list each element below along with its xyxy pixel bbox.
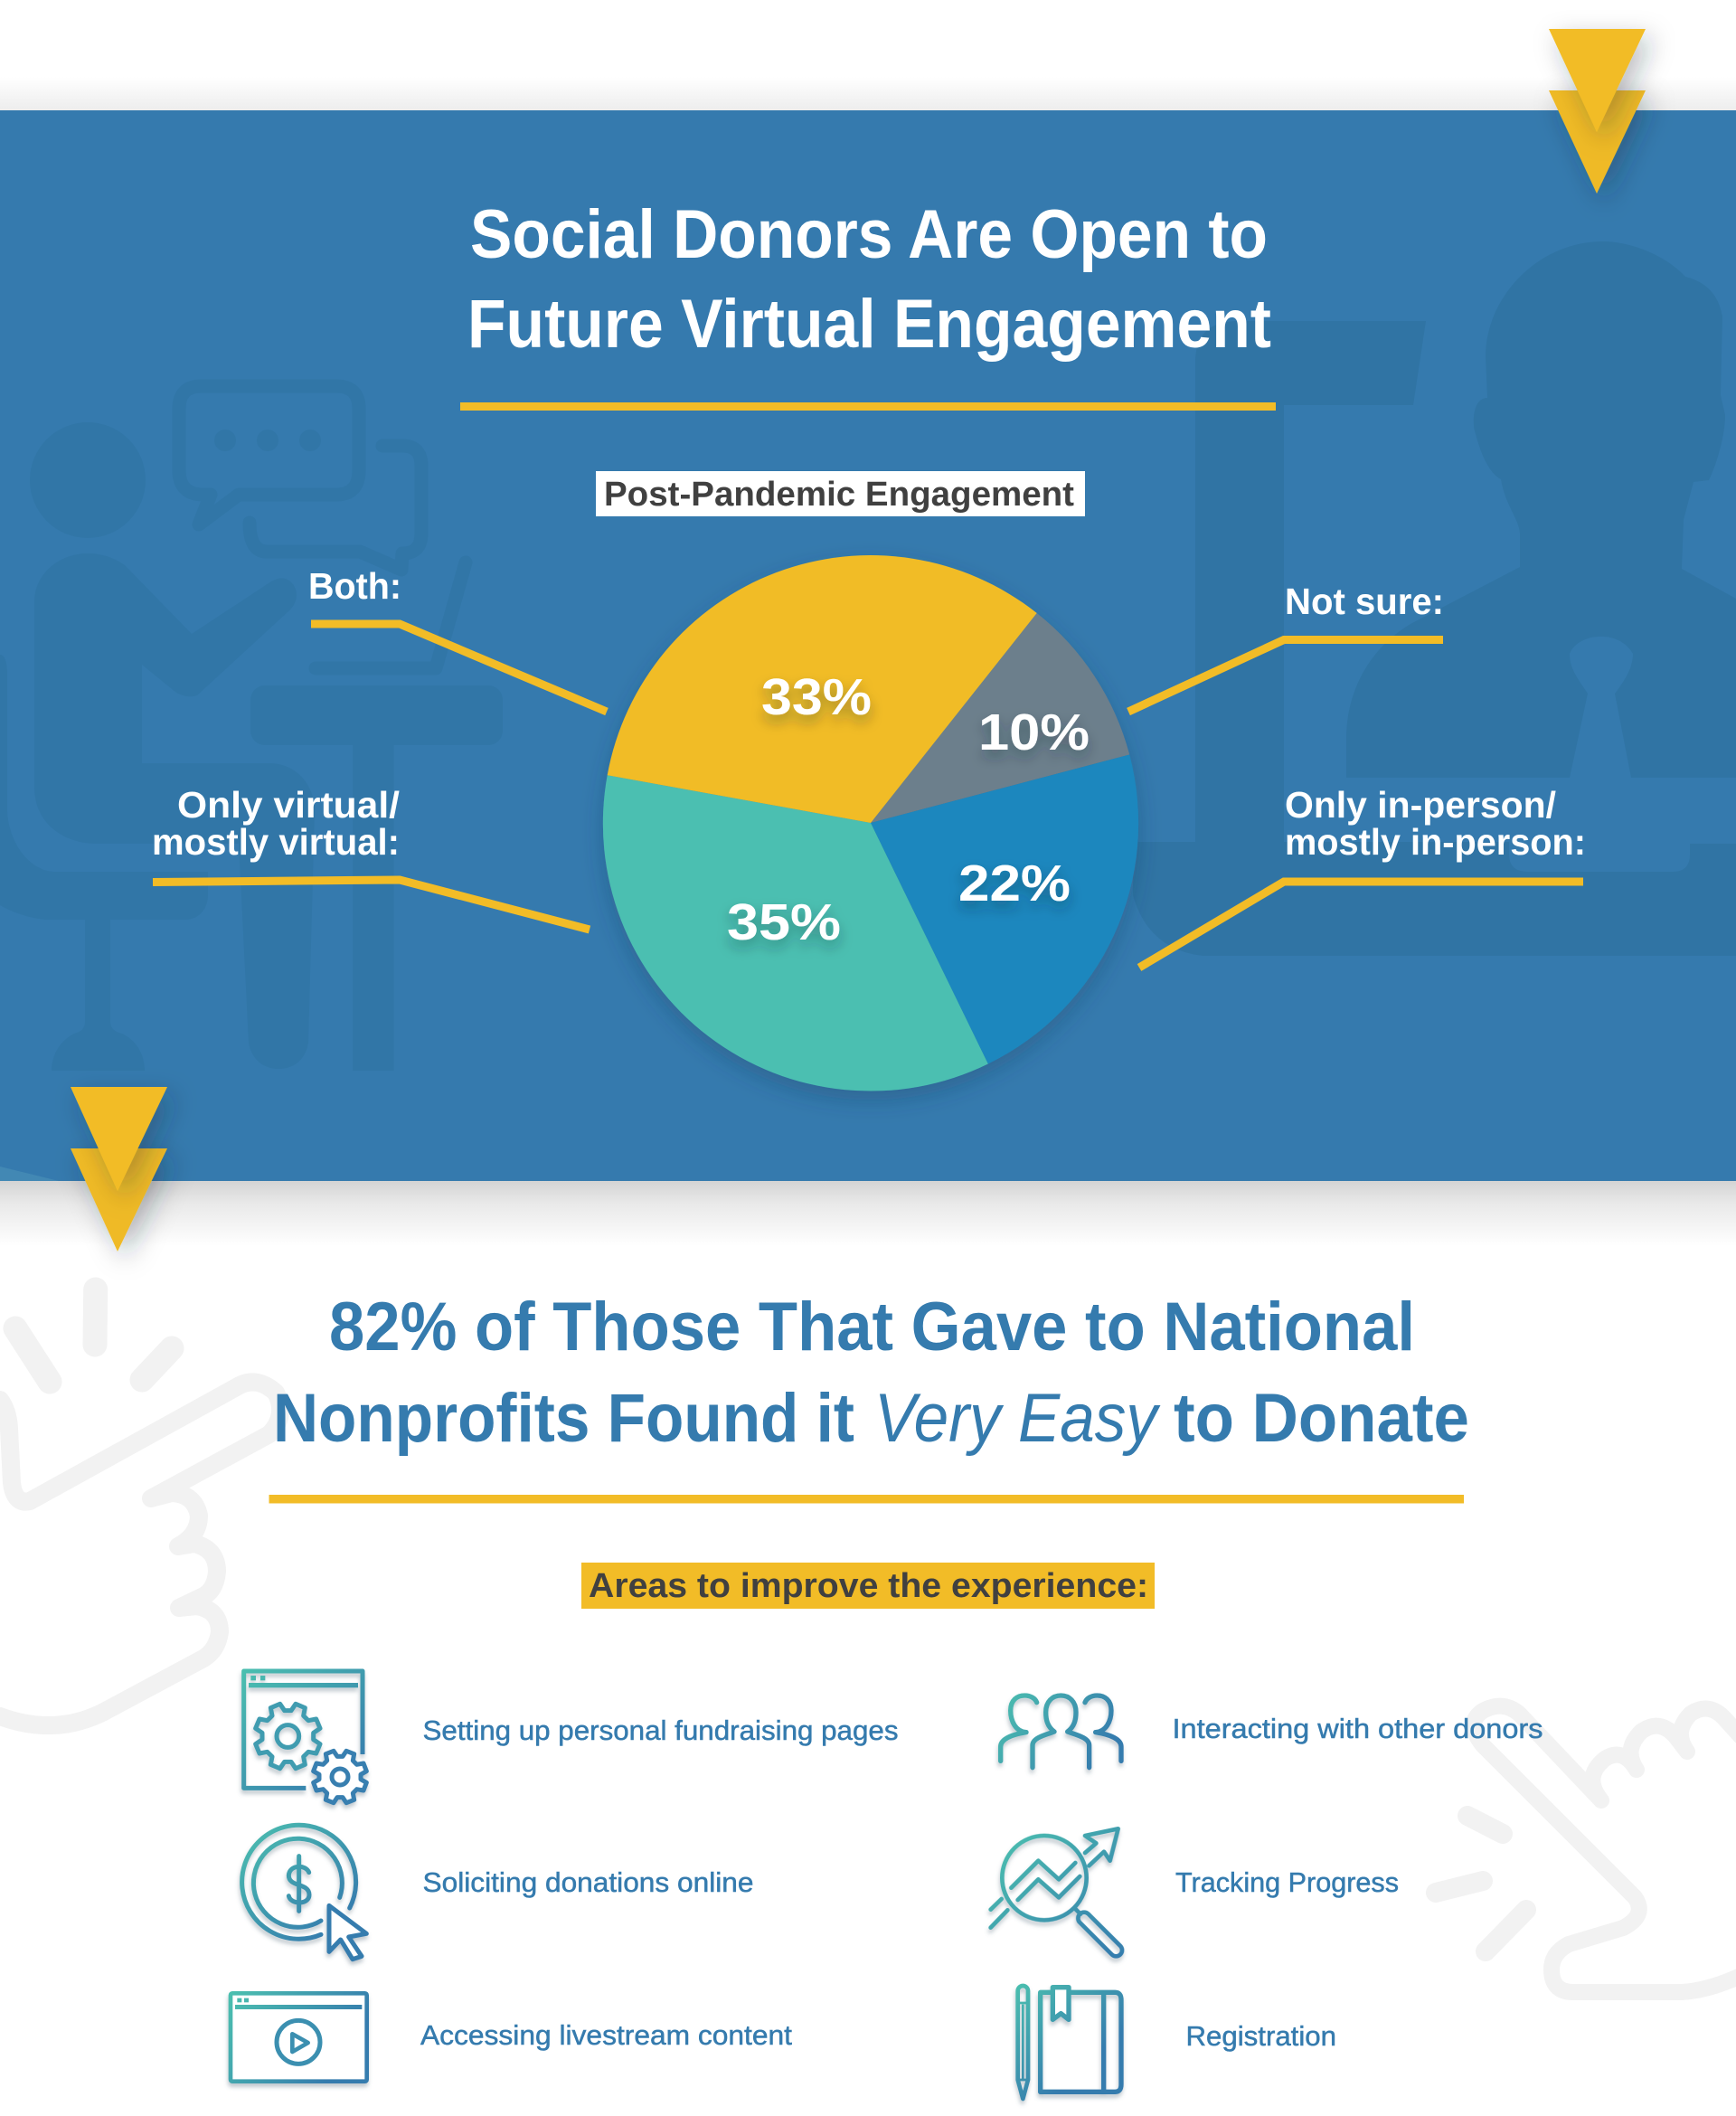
- label: Only virtual with leader line: mostly virtual:: [152, 821, 400, 863]
- band bottom shadow: [0, 1181, 1736, 1246]
- title: section one: [467, 196, 1271, 363]
- chevron arrow: top right: [1549, 29, 1646, 194]
- title: section two: 82% of Those That Gave to National: [329, 1289, 1415, 1365]
- label: Only in-person with leader line: [1139, 784, 1586, 968]
- label: Only virtual with leader line: [152, 784, 590, 930]
- title underline: [269, 1495, 1464, 1503]
- text: personal fundraising pages: Setting up personal fundraising pages: [423, 1715, 899, 1746]
- title: section two: [273, 1289, 1469, 1457]
- title: section one: Social Donors Are Open to: [470, 196, 1268, 273]
- title: section two: Very Easy: [874, 1380, 1161, 1457]
- label: Not sure with leader line: [1128, 581, 1444, 712]
- title: section one: Future Virtual Engagement: [467, 286, 1271, 363]
- value: both 33%: 33%: [761, 668, 872, 726]
- label: Both with leader line: Both:: [308, 565, 401, 607]
- watermark: pointing hand left: [0, 1289, 280, 1725]
- chart heading: Post-Pandemic Engagement: Post-Pandemic Engagement: [604, 476, 1074, 514]
- value: virtual 35%: 35%: [727, 893, 841, 951]
- title: section two: to Donate: [1174, 1380, 1469, 1457]
- watermark: pointing hand right: [1436, 1706, 1736, 1992]
- chevron arrow: bottom left: [71, 1087, 167, 1252]
- value: not sure 10%: 10%: [978, 704, 1090, 761]
- band top shadow: [0, 77, 1736, 110]
- text: tracking progress: Tracking Progress: [1175, 1866, 1399, 1898]
- watermark: person at laptop with speech bubbles: [0, 386, 503, 1071]
- band corner accent: [0, 1167, 59, 1181]
- icon: browser window with gears: [244, 1671, 366, 1803]
- icon: notebook and pencil: [1018, 1986, 1121, 2099]
- value: in-person 22%: 22%: [958, 855, 1071, 912]
- pie chart: [603, 555, 1138, 1091]
- text: interacting with donors: Interacting with other donors: [1172, 1713, 1543, 1744]
- label: Only in-person with leader line: Only in-person/: [1285, 784, 1556, 826]
- icon: group of people: [1001, 1696, 1121, 1768]
- title: section two: Nonprofits Found it: [273, 1380, 854, 1457]
- label: Not sure with leader line: Not sure:: [1285, 581, 1444, 622]
- title underline: [460, 402, 1276, 411]
- label: Only in-person with leader line: mostly in-person:: [1285, 821, 1586, 863]
- icon: magnifier with rising chart: [991, 1828, 1125, 1959]
- text: registration: Registration: [1186, 2020, 1336, 2052]
- text: soliciting donations: Soliciting donations online: [423, 1866, 754, 1898]
- icon: video window with play button: [231, 1993, 367, 2082]
- label: Only virtual with leader line: Only virtual/: [177, 784, 400, 826]
- panel: blue band: [0, 110, 1736, 1181]
- icon: dollar coin with cursor: [242, 1825, 366, 1960]
- label: Both with leader line: [308, 565, 607, 712]
- text: livestream content: Accessing livestream content: [420, 2019, 792, 2051]
- watermark: person behind monitor at desk: [1133, 241, 1736, 956]
- subheading: areas to improve: Areas to improve the experience:: [589, 1567, 1148, 1605]
